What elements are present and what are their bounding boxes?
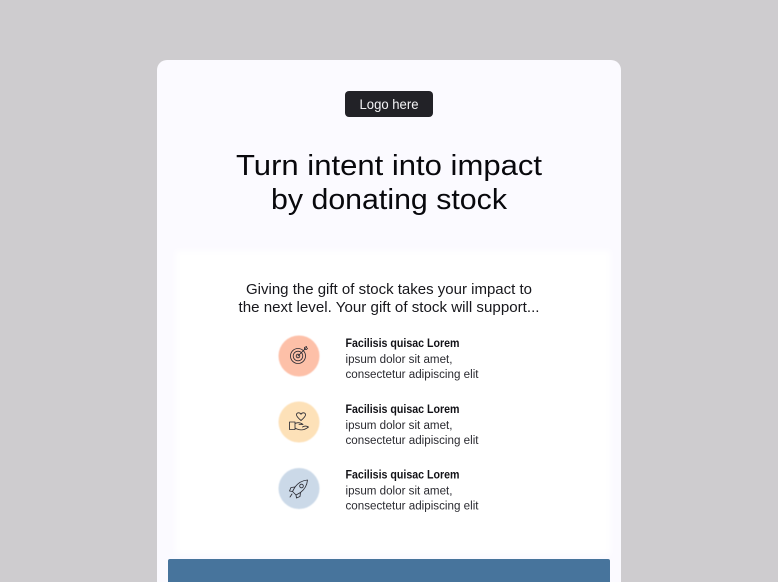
item text: consectetur adipiscing elit [346,435,479,447]
list item: rocket [278,468,479,512]
intro text [238,282,540,316]
item text: ipsum dolor sit amet, [346,420,452,432]
logo badge [345,91,433,117]
item text: Facilisis quisac Lorem [346,338,460,350]
item text: ipsum dolor sit amet, [346,486,452,498]
item text [346,404,479,447]
title: by donating stock [271,184,508,216]
footer bar [168,559,610,582]
item text: consectetur adipiscing elit [346,500,479,512]
item text: ipsum dolor sit amet, [346,354,452,366]
panel: content [176,251,610,554]
title: Turn intent into impact [236,150,542,182]
item text: Facilisis quisac Lorem [346,404,460,416]
title [236,150,542,216]
item text [346,470,479,512]
intro text: Giving the gift of stock takes your impact to [246,282,532,298]
intro text: the next level. Your gift of stock will support... [238,300,540,316]
logo badge: Logo here [360,96,419,112]
list item: target [278,336,479,381]
list item: giving hand [278,402,479,447]
icon: hand with heart [278,402,320,442]
item text: Facilisis quisac Lorem [346,470,460,482]
item text [346,338,479,381]
icon: target [278,336,320,376]
item text: consectetur adipiscing elit [346,369,479,381]
icon: rocket [278,468,320,509]
panel: outer card [157,60,621,582]
